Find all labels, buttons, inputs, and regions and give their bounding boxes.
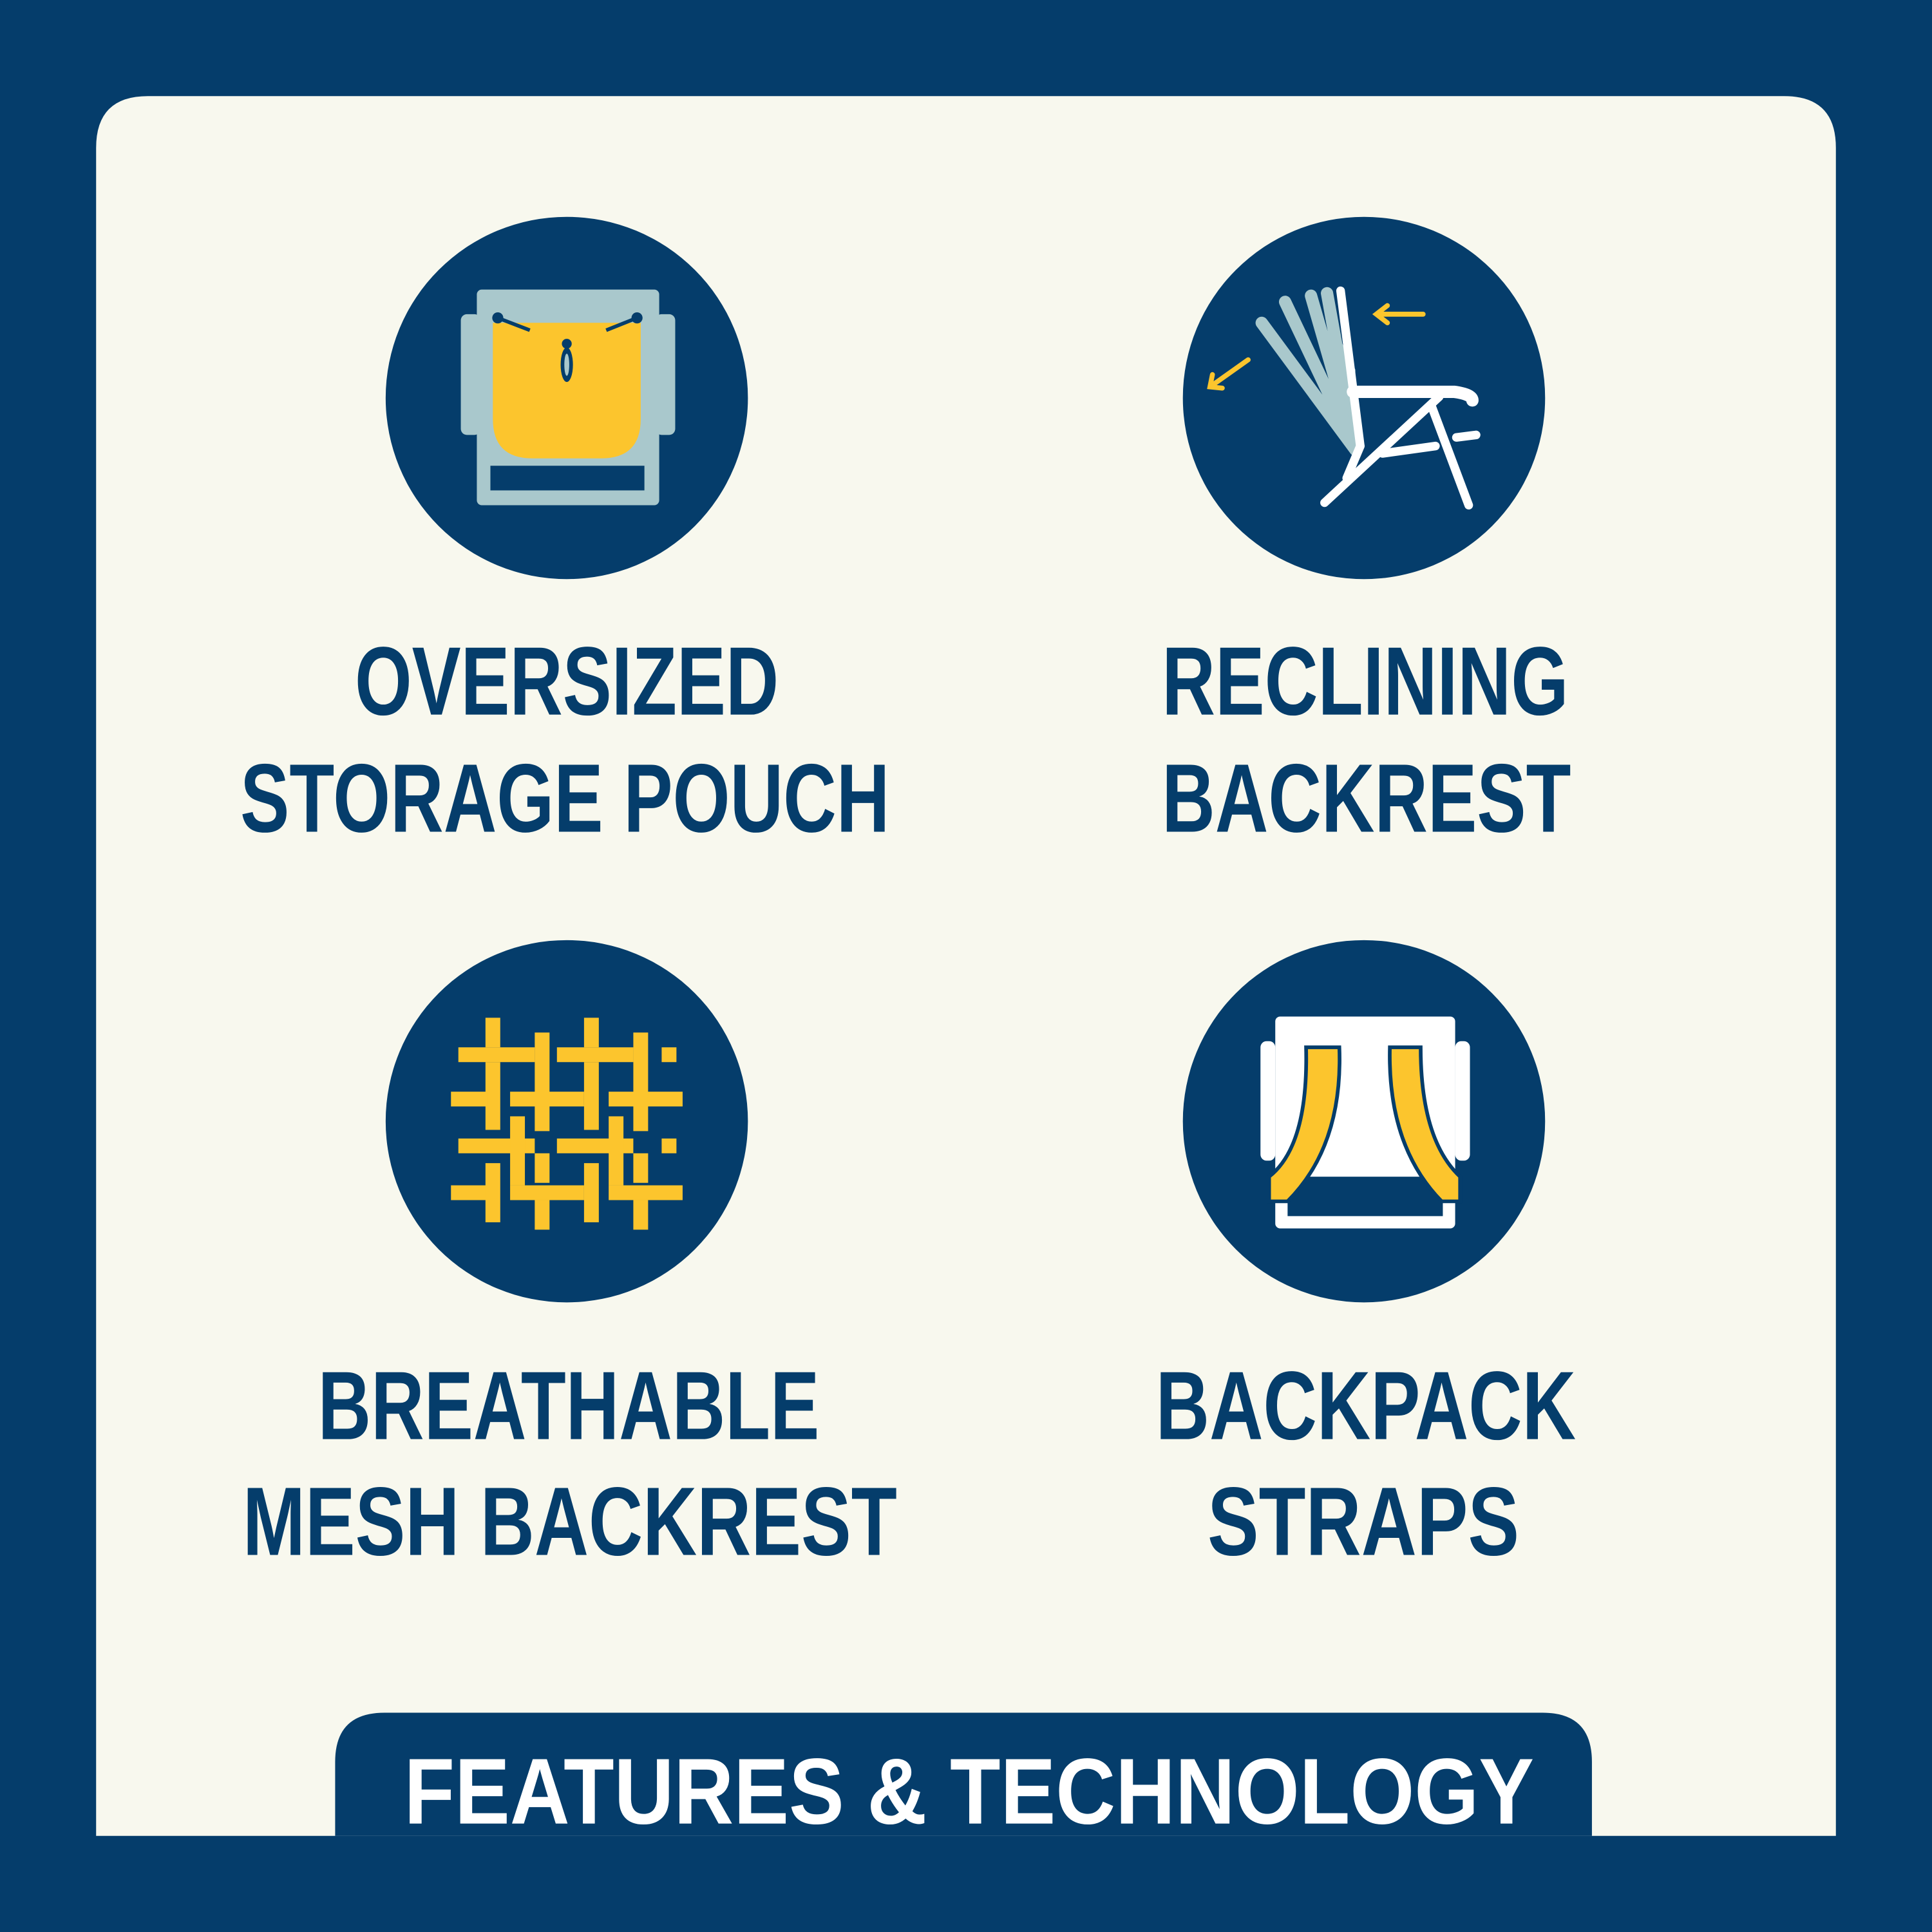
- text: breathable mesh backrest: MESH BACKREST: [243, 1468, 897, 1577]
- title tab: features & technology: FEATURES & TECHNOLOGY: [404, 1739, 1534, 1844]
- icon: backpack straps chair: [1260, 1016, 1470, 1229]
- text: oversized storage pouch: STORAGE POUCH: [240, 744, 889, 853]
- text: reclining backrest: BACKREST: [1162, 744, 1571, 853]
- text: reclining backrest: [1162, 627, 1571, 853]
- panel: icon circle reclining backrest: [1183, 217, 1545, 579]
- text: breathable mesh backrest: BREATHABLE: [318, 1352, 819, 1461]
- text: oversized storage pouch: OVERSIZED: [355, 627, 779, 736]
- text: breathable mesh backrest: [243, 1352, 897, 1577]
- panel: icon circle backpack straps: [1183, 940, 1545, 1302]
- icon: reclining chair: [1210, 291, 1476, 505]
- text: backpack straps: BACKPACK: [1156, 1352, 1576, 1461]
- icon: chair with pouch: [461, 290, 675, 505]
- text: backpack straps: STRAPS: [1208, 1468, 1519, 1577]
- icon: mesh grid: [451, 1018, 683, 1229]
- text: oversized storage pouch: [240, 627, 889, 853]
- text: reclining backrest: RECLINING: [1162, 627, 1569, 736]
- panel: icon circle breathable mesh: [386, 940, 748, 1302]
- panel: icon circle oversized storage pouch: [386, 217, 748, 579]
- text: backpack straps: [1156, 1352, 1576, 1577]
